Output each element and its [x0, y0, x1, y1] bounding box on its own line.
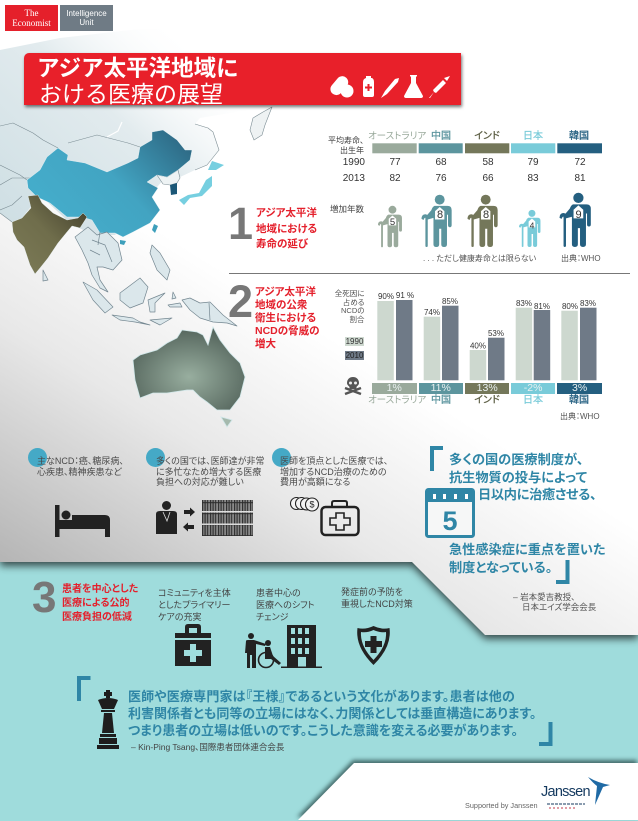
- band: Korea 3%: 3%: [572, 382, 587, 394]
- logo: Intelligence Unit: [60, 5, 113, 31]
- solution text 2: 患者中心の: [256, 588, 301, 598]
- solution text 2: 医療へのシフト: [256, 600, 315, 610]
- values: Australia: [389, 157, 401, 184]
- header: Australia: オーストラリア: [368, 131, 426, 142]
- band: India 13%: [465, 383, 509, 394]
- values: India: [482, 157, 494, 184]
- change bands with percentages: [372, 382, 602, 394]
- person: Korea 9 years: [560, 193, 591, 247]
- header: Korea: 韓国: [569, 131, 589, 142]
- name: Korea: 韓国: [569, 395, 589, 406]
- title banner: [24, 53, 461, 105]
- section 1 number: 1: [228, 198, 253, 249]
- challenge text 3: 費用が高額になる: [280, 477, 350, 487]
- life expectancy row labels: [328, 136, 364, 154]
- icon: calendar 5 days: [425, 488, 475, 538]
- section 2 heading: 増大: [255, 338, 276, 350]
- country headers: [368, 130, 589, 142]
- bars: India: 40%: [470, 342, 486, 350]
- person: China 8 years: [422, 195, 452, 247]
- section 2 heading: NCDの脅威の: [255, 325, 319, 337]
- quote 1 text upper: 日以内に治癒させる、: [478, 487, 596, 502]
- map: South Korea: [170, 183, 177, 195]
- icon: shield with cross: [356, 625, 391, 666]
- map: Tasmania: [221, 417, 232, 427]
- band: Australia 1%: 1%: [387, 382, 402, 394]
- map: China: [27, 130, 192, 237]
- solution text 3: [341, 587, 413, 609]
- quote 1 text upper: 多くの国の医療制度が、: [449, 452, 583, 467]
- person: Australia 5 years: 5: [390, 217, 395, 228]
- quote 2 text: つまり患者の立場は低いのです。こうした意識を変える必要があります。: [128, 723, 518, 738]
- NCD axis label: [335, 289, 364, 324]
- values: Australia: 82: [389, 173, 401, 184]
- icon: hospital bed: [55, 505, 110, 537]
- challenge text 3: [280, 456, 388, 487]
- icon: medical kit outline: [320, 500, 360, 536]
- section 3 heading: [62, 583, 138, 623]
- quote 1 attribution: – 岩本愛吉教授、: [513, 592, 575, 602]
- pictogram: years gained per country: [378, 192, 591, 248]
- section 2 number: 2: [228, 276, 253, 327]
- bullet circle 2: [146, 448, 165, 467]
- person: India 8 years: [468, 195, 498, 247]
- person: Japan 4 years: [519, 210, 540, 247]
- legend: 2010: 2010: [346, 351, 363, 360]
- quote 2 text: 医師や医療専門家は『王様』であるという文化があります。患者は他の: [128, 688, 515, 704]
- solution text 3: 発症前の予防を: [341, 587, 403, 597]
- icon: chess king: [97, 690, 119, 749]
- quote 2 text: [128, 688, 536, 739]
- section 2 heading: アジア太平洋: [255, 286, 316, 298]
- section 2 heading: 地域の公衆: [255, 299, 307, 311]
- challenge text 1: 心疾患、精神疾患など: [37, 466, 122, 476]
- years: [343, 157, 365, 184]
- NCD axis label: 割合: [350, 315, 364, 324]
- icon: skull and crossbones: [344, 377, 362, 396]
- icon: coins: [290, 497, 320, 512]
- challenge text 2: 負担への対応が難しい: [156, 477, 244, 487]
- country names under chart: [368, 394, 589, 406]
- icon: hospital building: [281, 625, 322, 668]
- challenge text 1: [37, 456, 124, 476]
- quote 1 opening bracket: [430, 446, 443, 471]
- section 1 heading: 寿命の延び: [256, 238, 308, 250]
- logo: The Economist: Economist: [12, 18, 51, 28]
- bars: Korea: 80%: [562, 302, 578, 311]
- challenge text 1: 主なNCD：癌、糖尿病、: [37, 456, 124, 466]
- section 3 heading: 医療負担の低減: [62, 612, 132, 623]
- bars: Japan: 83%: [516, 299, 532, 308]
- header: China: 中国: [431, 131, 451, 142]
- solution text 1: コミュニティを主体: [158, 588, 231, 598]
- quote 2 closing bracket: [539, 722, 553, 746]
- bars: India: [470, 329, 504, 380]
- title line 1: アジア太平洋地域に: [37, 56, 239, 81]
- challenge text 3: 医師を頂点とした医療では、: [280, 456, 388, 466]
- section 3 number: 3: [32, 573, 56, 622]
- challenge text 2: 多くの国では、医師達が非常: [156, 456, 264, 466]
- quote 1 attribution: [513, 592, 596, 612]
- bars: Korea: [561, 299, 596, 380]
- name: Japan: 日本: [523, 395, 543, 406]
- title line 2: おける医療の展望: [39, 81, 223, 107]
- map: northern island: [250, 107, 272, 140]
- logo: The Economist: [5, 5, 58, 31]
- quote 1 text upper: 抗生物質の投与によって: [449, 470, 587, 484]
- section 3 heading: 患者を中心とした: [62, 584, 138, 595]
- bar chart: NCD share of deaths: [377, 291, 596, 380]
- solution text 3: 重視したNCD対策: [341, 599, 413, 609]
- life expectancy row labels: 出生年: [340, 146, 364, 154]
- solution text 1: ケアの充実: [158, 612, 201, 622]
- name: China: 中国: [431, 395, 451, 406]
- quote 1 text lower: [449, 542, 606, 574]
- values: Korea: 81: [574, 173, 586, 184]
- section 1 heading: [256, 207, 317, 250]
- band: Korea 3%: [557, 383, 602, 394]
- bars: Australia: [377, 291, 414, 380]
- source 2: 出典：WHO: [560, 412, 600, 421]
- quote 2 attribution: – Kin-Ping Tsang、国際患者団体連合会長: [131, 742, 284, 752]
- map: North Korea: [157, 170, 180, 185]
- header: India: インド: [474, 131, 500, 142]
- band: Japan -2%: [511, 383, 555, 394]
- icon: coins: $: [309, 500, 315, 510]
- bars: Japan: 81%: [534, 302, 550, 311]
- bullet circle 1: [28, 448, 47, 467]
- logo swoosh: [588, 777, 610, 806]
- solution text 2: [256, 588, 315, 622]
- logo: Janssen: [541, 777, 611, 811]
- band: India 13%: 13%: [477, 382, 498, 394]
- values: Japan: [527, 157, 539, 184]
- supported by credit: Supported by Janssen: [465, 800, 538, 810]
- logo: Intelligence Unit: Unit: [79, 18, 94, 27]
- icon: crowd of patients: [202, 500, 253, 536]
- source 1: 出典：WHO: [561, 254, 601, 263]
- section 2 heading: 衛生における: [255, 312, 316, 324]
- values: Korea: [574, 157, 586, 184]
- icon: doctor with arrows: [156, 501, 195, 534]
- NCD axis label: NCDの: [341, 306, 364, 315]
- bars: India: 53%: [488, 329, 504, 338]
- quote 2 text: 利害関係者とも同等の立場にはなく、力関係としては垂直構造にあります。: [128, 706, 536, 721]
- icon: calendar 5 days: 5: [442, 506, 458, 536]
- quote 1 text lower: 急性感染症に重点を置いた: [449, 542, 606, 557]
- values: Japan: 83: [527, 173, 539, 184]
- years: 2013: [343, 173, 365, 184]
- life expectancy table: [343, 157, 586, 184]
- bars: China: 74%: [424, 308, 440, 317]
- values: Australia: 77: [389, 157, 401, 168]
- NCD axis label: 全死因に: [335, 289, 364, 298]
- values: Korea: 72: [574, 157, 586, 168]
- band: Australia 1%: [372, 383, 416, 394]
- solution text 1: [158, 588, 231, 622]
- section 1 heading: アジア太平洋: [256, 207, 317, 219]
- note: healthy life expectancy: . . . ただし健康寿命とは限らない: [423, 254, 536, 263]
- values: China: 76: [435, 173, 447, 184]
- header: Japan: 日本: [523, 131, 543, 142]
- section 3 heading: 医療による公的: [62, 598, 130, 609]
- values: China: 68: [435, 157, 447, 168]
- life expectancy colour bands: [372, 143, 602, 154]
- band: China 11%: 11%: [431, 382, 451, 394]
- values: Japan: 79: [527, 157, 539, 168]
- quote 1 closing bracket: [556, 560, 570, 584]
- person: China 8 years: 8: [437, 209, 443, 221]
- name: India: インド: [474, 395, 500, 406]
- bars: China: 85%: [442, 297, 458, 306]
- bars: Australia: 90%: [378, 292, 394, 301]
- bars: Japan: [516, 299, 550, 380]
- quote 2 opening bracket: [77, 676, 91, 701]
- challenge text 2: [156, 456, 264, 487]
- challenge text 2: に多忙なため増大する医療: [156, 466, 261, 476]
- person: Korea 9 years: 9: [575, 209, 582, 221]
- logo tagline marks: [547, 803, 585, 811]
- map: Japan: [179, 161, 224, 205]
- NCD axis label: 占める: [343, 298, 364, 307]
- icon: first aid case: [175, 624, 211, 666]
- bullet circle 3: [272, 448, 291, 467]
- quote 1 text lower: 制度となっている。: [449, 560, 552, 574]
- quote 1 attribution: 日本エイズ学会会長: [522, 602, 596, 612]
- name: Australia: オーストラリア: [368, 395, 426, 406]
- icons: medical supplies: [330, 75, 450, 98]
- quote 1 text upper: [449, 452, 596, 502]
- logo: Intelligence Unit: Intelligence: [66, 9, 107, 18]
- years: 1990: [343, 157, 365, 168]
- person: Japan 4 years: 4: [530, 220, 535, 230]
- bars: China: [424, 297, 458, 380]
- band: Japan -2%: -2%: [524, 382, 542, 394]
- life expectancy row labels: 平均寿命、: [328, 136, 364, 145]
- values: India: 58: [482, 157, 494, 168]
- solution text 2: チェンジ: [256, 612, 288, 622]
- map: Russia and central Asia land: [0, 26, 285, 235]
- solution text 1: としたプライマリー: [158, 600, 230, 610]
- map: mainland Southeast Asia and islands: [43, 227, 237, 326]
- values: China: [435, 157, 447, 184]
- icon: patient in wheelchair with carer: [245, 633, 281, 668]
- challenge text 3: 増加するNCD治療のための: [280, 466, 387, 476]
- values: India: 66: [482, 173, 494, 184]
- map: India: [12, 195, 87, 274]
- logo wordmark: Janssen: [541, 784, 590, 800]
- band: China 11%: [419, 383, 463, 394]
- years gained label: 増加年数: [330, 204, 364, 214]
- bars: Australia: 91 %: [396, 291, 414, 300]
- section 2 heading: [255, 286, 319, 350]
- bars: Korea: 83%: [580, 299, 596, 308]
- person: Australia 5 years: [378, 206, 402, 247]
- map: Australia: [133, 327, 245, 410]
- person: India 8 years: 8: [483, 209, 489, 221]
- logo: The Economist: The: [24, 8, 38, 18]
- panel: footer white corner: [296, 757, 638, 820]
- legend: 1990: 1990: [346, 337, 363, 346]
- section 1 heading: 地域における: [256, 222, 317, 234]
